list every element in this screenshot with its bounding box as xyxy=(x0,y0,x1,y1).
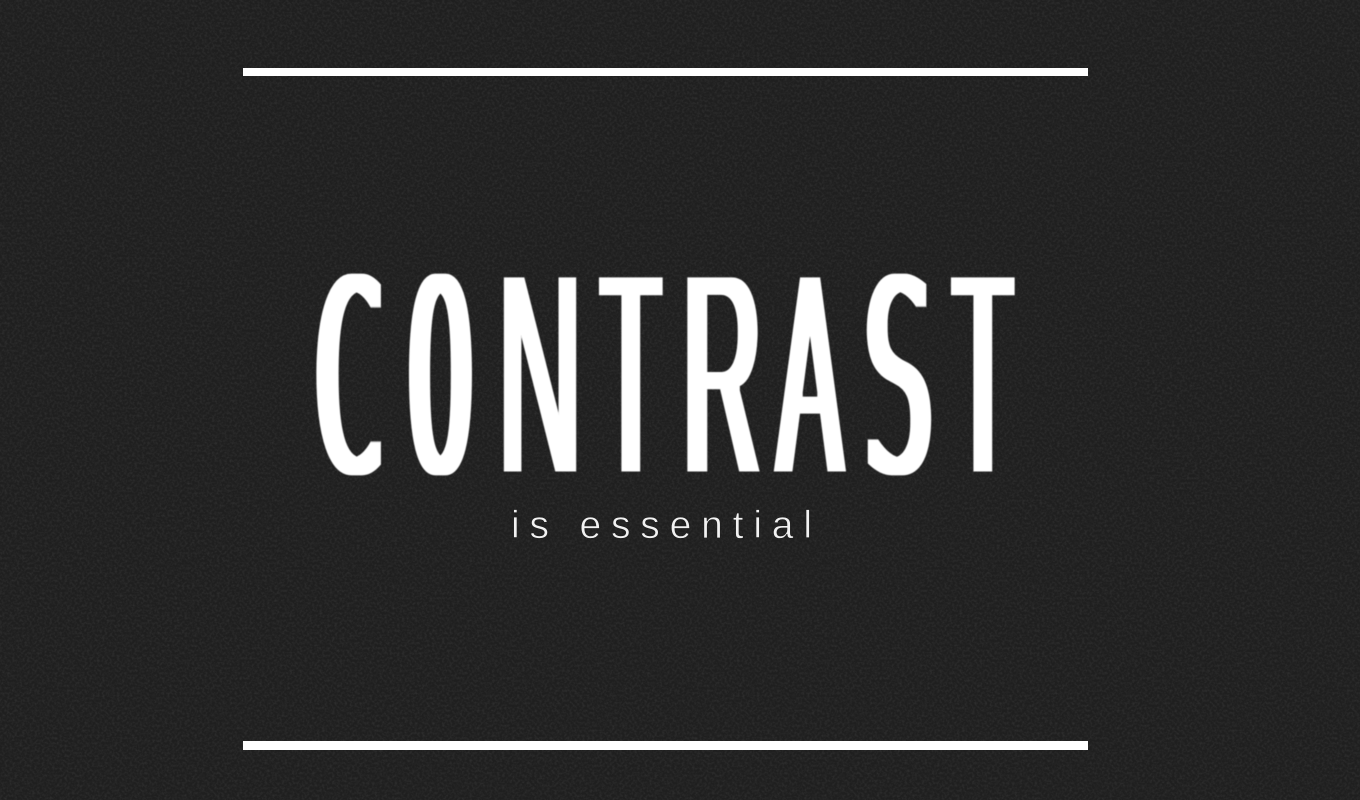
title: CONTRAST: R xyxy=(684,214,761,536)
title: CONTRAST: O xyxy=(408,221,473,538)
top rule xyxy=(243,68,1088,76)
title: CONTRAST xyxy=(313,214,1012,539)
subtitle: is essential: is essential xyxy=(511,504,812,547)
title: CONTRAST: A xyxy=(778,214,842,535)
bottom rule xyxy=(243,741,1088,750)
title: CONTRAST: N xyxy=(498,214,582,535)
title: CONTRAST: T xyxy=(602,214,660,535)
title: CONTRAST: T xyxy=(954,214,1012,535)
title: CONTRAST: C xyxy=(313,221,385,538)
title: CONTRAST: S xyxy=(864,223,934,539)
